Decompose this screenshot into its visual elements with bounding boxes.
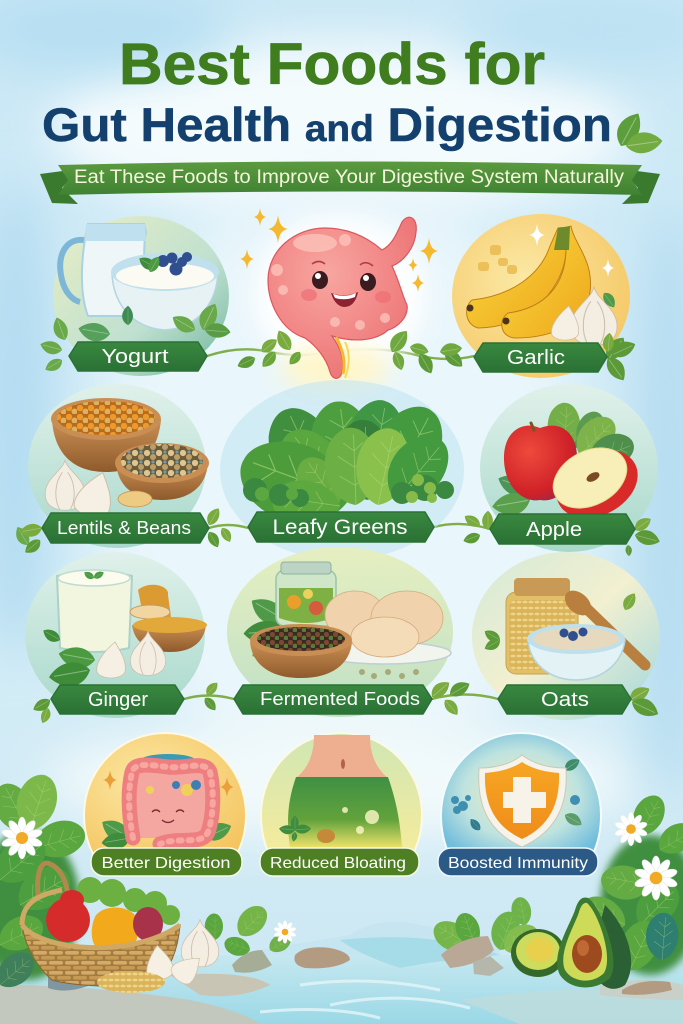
icon: bean bowl — [115, 443, 209, 500]
icon: title leaf — [611, 108, 664, 155]
label: oats: Oats — [541, 689, 589, 711]
plants: center-left foliage — [205, 900, 297, 960]
panel: fermented foods — [202, 547, 472, 718]
label: apple: Apple — [526, 519, 582, 541]
icon: garlic bulb — [551, 287, 618, 345]
icon: shield — [479, 755, 566, 847]
label: fermented foods: Fermented Foods — [260, 689, 420, 709]
panel: yogurt — [39, 216, 231, 376]
leaves — [462, 511, 662, 556]
label: boosted immunity — [438, 848, 598, 876]
icon: garlic and nut — [45, 460, 152, 519]
panel: lentils and beans — [12, 384, 234, 557]
panel: oats — [472, 552, 662, 721]
plants: center-right foliage — [428, 896, 543, 960]
scattered seeds — [359, 669, 419, 679]
panel: leafy greens — [220, 380, 464, 560]
label: apple — [490, 514, 635, 544]
yellow pepper — [92, 908, 138, 948]
icon: daisy — [1, 817, 43, 859]
icon: milk jug — [60, 224, 146, 316]
icon: bread plate — [319, 591, 451, 664]
icon: ginger bowl — [130, 585, 207, 652]
icon: lentil bowl — [51, 398, 161, 472]
icon: yogurt bowl — [111, 252, 219, 330]
label: reduced bloating — [260, 848, 419, 876]
title — [42, 32, 612, 151]
panel: reduced bloating — [260, 733, 422, 876]
illustration: basket of vegetables — [22, 863, 180, 986]
icon: bananas — [466, 226, 591, 338]
icon: oat bowl — [527, 624, 625, 680]
label: ginger — [51, 685, 184, 714]
plants: right foliage — [575, 790, 683, 977]
panel: ginger — [25, 552, 207, 725]
illustration: avocado — [511, 898, 631, 989]
icon: clover — [279, 816, 335, 843]
icon: torso — [288, 735, 402, 848]
icon: ginger drink glass — [57, 569, 132, 652]
label: better digestion — [91, 848, 242, 876]
illustration: rocks — [48, 936, 672, 995]
face — [301, 262, 391, 307]
title line 1: Best Foods for — [119, 32, 545, 97]
icon: whole apple — [504, 423, 577, 500]
leaves — [31, 626, 97, 725]
label: yogurt: Yogurt — [102, 346, 169, 368]
label: boosted immunity: Boosted Immunity — [448, 855, 588, 872]
label: lentils and beans: Lentils & Beans — [57, 518, 191, 538]
basket body — [22, 925, 180, 986]
panel: apple — [462, 384, 662, 556]
label: lentils and beans — [42, 513, 209, 543]
leaves — [39, 300, 231, 375]
banner ribbon — [40, 162, 660, 204]
icon: garlic — [97, 631, 166, 678]
vine leaves — [236, 327, 467, 376]
tomato — [46, 890, 90, 942]
label: leafy greens: Leafy Greens — [272, 516, 408, 539]
icon: oat jar — [506, 578, 578, 674]
icon: greens bunch — [229, 395, 461, 539]
panel: garlic — [452, 214, 638, 384]
banner text: Eat These Foods to Improve Your Digestive System Naturally — [74, 167, 625, 188]
plants: left foliage — [0, 769, 89, 995]
icon: bean bowl — [250, 624, 352, 678]
leaves — [601, 332, 638, 384]
icon: leaves behind apple — [490, 402, 639, 518]
label: fermented foods — [234, 685, 432, 714]
vine connectors — [184, 349, 498, 699]
plum — [133, 907, 163, 941]
label: ginger: Ginger — [88, 689, 148, 711]
label: better digestion: Better Digestion — [102, 855, 230, 872]
panel: boosted immunity — [438, 733, 601, 876]
label: oats — [498, 685, 631, 714]
leaves — [12, 505, 234, 557]
label: garlic: Garlic — [507, 347, 565, 369]
icon: intestines — [129, 754, 213, 844]
icon: wooden spoon — [560, 586, 645, 665]
bottom scene: river and shore — [0, 922, 683, 1024]
label leaves — [202, 677, 472, 718]
label: reduced bloating: Reduced Bloating — [270, 855, 406, 872]
illustration: garlic and grains — [97, 919, 219, 993]
leaves — [482, 590, 662, 721]
icon: apple half — [543, 436, 650, 532]
label: yogurt — [69, 342, 207, 371]
title line 2: Gut Health and Digestion — [42, 98, 612, 151]
label: leafy greens — [248, 512, 434, 542]
panel: better digestion — [84, 733, 246, 876]
icon: fermented jar — [276, 562, 336, 626]
greens — [77, 877, 180, 925]
illustration: stomach mascot — [236, 208, 467, 390]
leaves — [97, 815, 234, 852]
label: garlic — [474, 343, 607, 372]
